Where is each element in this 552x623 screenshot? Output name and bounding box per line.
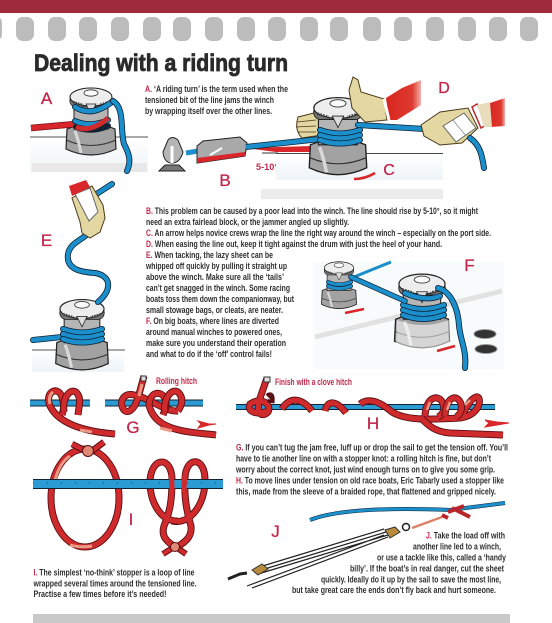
text block B to F: can’t get snagged in the winch. Some racing [146,283,290,294]
text block J: or use a tackle like this, called a ‘handy [377,552,506,564]
label I: I [129,510,133,529]
text block A: A. ‘A riding turn’ is the term used when the [145,84,288,95]
label A: A [41,89,53,108]
text block A [145,84,288,117]
label G: G [126,418,140,437]
label H: H [367,414,379,433]
illustration G: rolling hitch stages [30,376,216,435]
caption: Finish with a clove hitch: Finish with a clove hitch [275,377,352,388]
footer grey bar [33,614,510,623]
arrow G [198,421,216,428]
title: Dealing with a riding turn [34,50,288,77]
text block J: J. Take the load off with [426,530,505,542]
arrow C [354,173,375,179]
arrow H [485,420,509,427]
text block B to F: above the winch. Make sure all the ‘tails’ [146,272,284,283]
text block B to F: D. When easing the line out, keep it tight against the drum with just the heel of your hand. [146,239,442,250]
label E: E [41,231,52,250]
label F: F [464,256,475,275]
label D: D [438,80,450,97]
illustration E: winch with line pulled upward [32,180,125,372]
text block B to F: whipped off quickly by pulling it straight up [145,261,287,272]
illustration H: stopper [236,377,503,435]
label C: C [383,162,395,179]
text block I [33,568,196,600]
illustration B: fairlead and jammer [159,137,247,171]
text block B to F: small stowage bags, or cleats, are neater. [146,305,283,316]
notebook binding holes [0,17,538,41]
text block J [292,530,506,596]
angle label 5-10 degrees [256,153,278,173]
text block B to F: boats toss them down the companionway, but [146,294,295,305]
text block B to F: and what to do if the ‘off’ control fails! [146,349,272,360]
text block J: another line led to a winch, [413,542,501,552]
text block A: by wrapping itself over the other lines. [145,106,272,117]
text block B to F: E. When tacking, the lazy sheet can be [146,250,273,261]
angle label 5-10 degrees: 5-10° [256,162,278,173]
text block I: wrapped several times around the tensioned line. [33,578,196,590]
illustration F: two winches [314,262,504,369]
text block I: Practise a few times before it’s needed! [34,589,166,600]
illustration C/D: winch with hands [245,77,505,199]
label B: B [219,171,231,190]
text block B to F [145,206,491,360]
label J: J [271,522,280,541]
text block B to F: make sure you understand their operation [146,338,286,349]
caption: Rolling hitch: Rolling hitch [156,376,197,387]
illustration I: loop stopper [33,442,223,554]
header band [0,0,552,13]
text block G and H [235,442,508,498]
text block B to F: around manual winches to powered ones, [146,327,282,338]
text block B to F: F. On big boats, where lines are diverted [146,316,279,327]
text block I: I. The simplest ‘no-think’ stopper is a loop of line [34,568,194,578]
text block B to F: need an extra fairlead block, or the jammer angled up slightly. [146,217,349,228]
illustration A: winch with riding turn [30,88,148,172]
text block A: tensioned bit of the line jams the winch [145,95,274,106]
illustration J: handy billy tackle [228,503,505,588]
